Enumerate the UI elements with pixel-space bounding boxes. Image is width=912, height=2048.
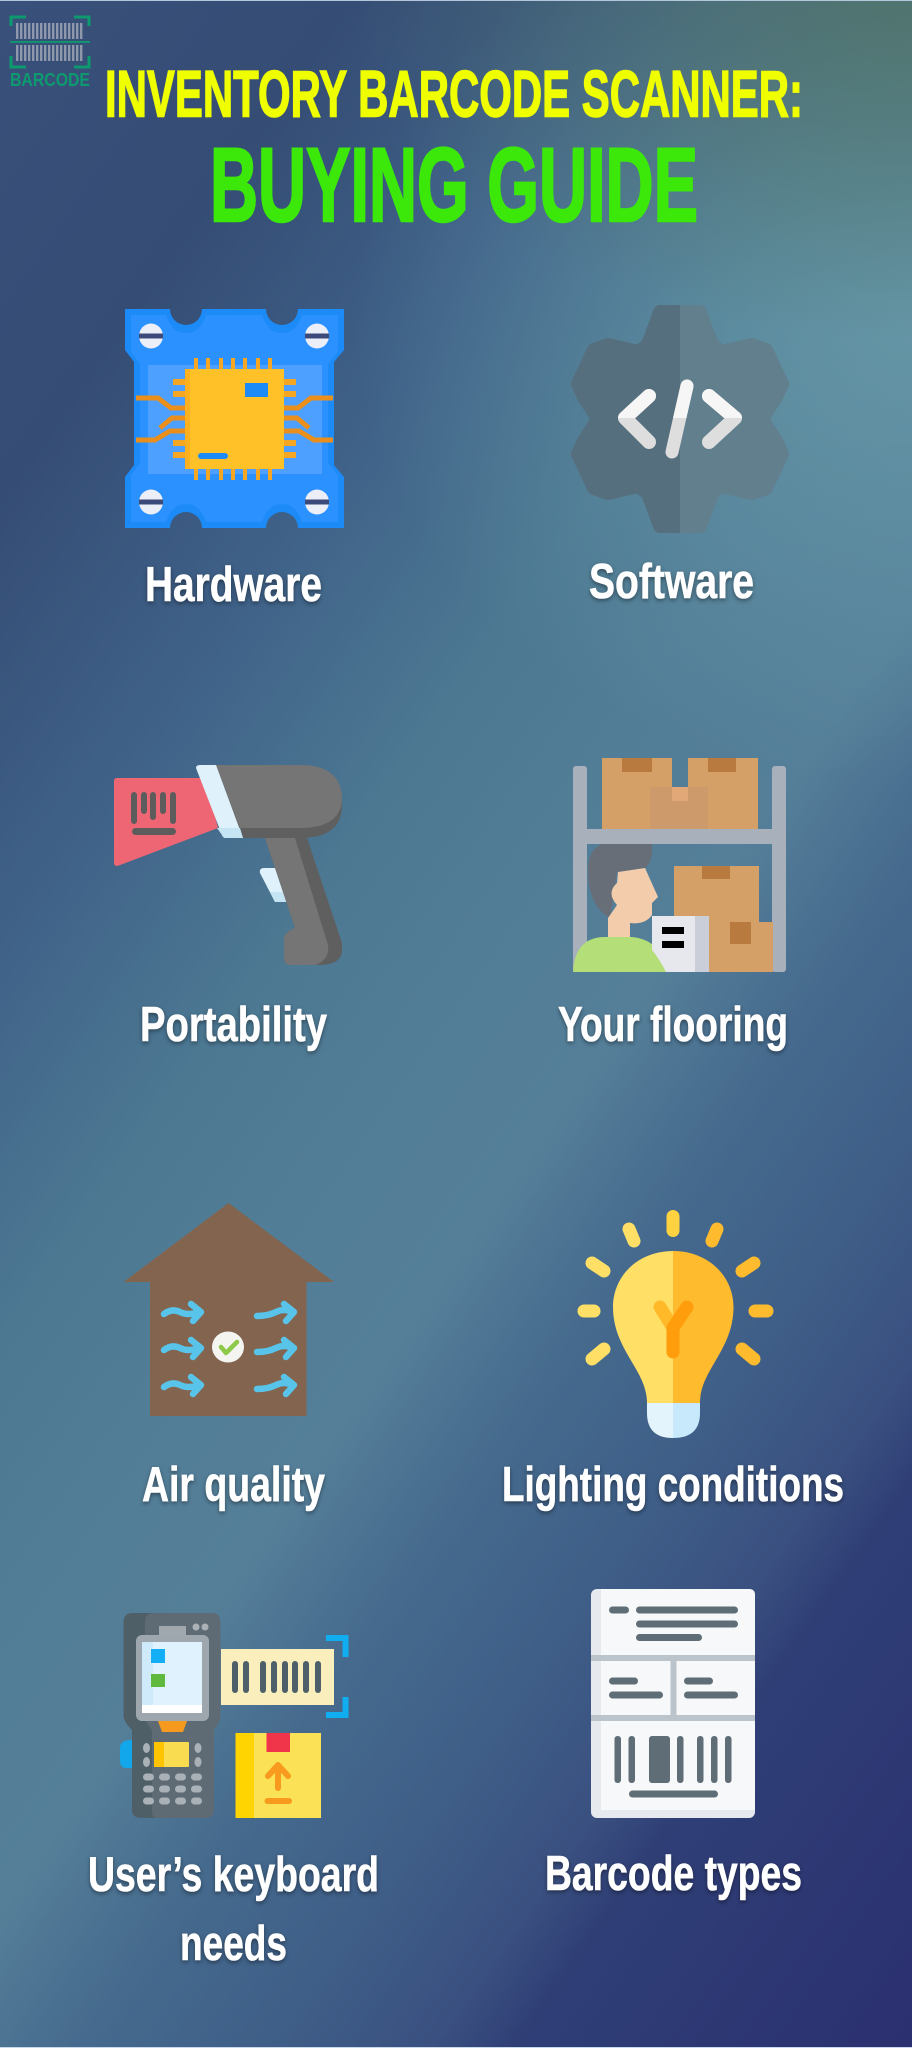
label: Air quality: Air quality [142,1458,325,1512]
label: Software: Software [589,555,754,609]
label: Your flooring: Your flooring [558,998,788,1052]
icon: handheld scanner with package [120,1613,346,1818]
icon: barcode scanner gun [114,765,342,965]
icon: warehouse shelf with worker [573,758,786,972]
label: Portability: Portability [140,998,327,1052]
label: User's keyboard needs: needs [180,1917,287,1971]
icon: light bulb [584,1216,767,1438]
logo: barcode [10,17,90,90]
icon: hardware circuit board [125,309,344,528]
label: Barcode types: Barcode types [545,1847,802,1901]
label: Hardware: Hardware [145,558,322,612]
icon: software gear [578,312,782,526]
icon: shipping label with barcode [591,1589,755,1818]
icon: house with air flow [124,1203,334,1416]
logo: barcode: BARCODE [10,70,90,90]
label: User's keyboard needs [88,1848,379,1971]
label: User's keyboard needs: User’s keyboard [88,1848,379,1902]
